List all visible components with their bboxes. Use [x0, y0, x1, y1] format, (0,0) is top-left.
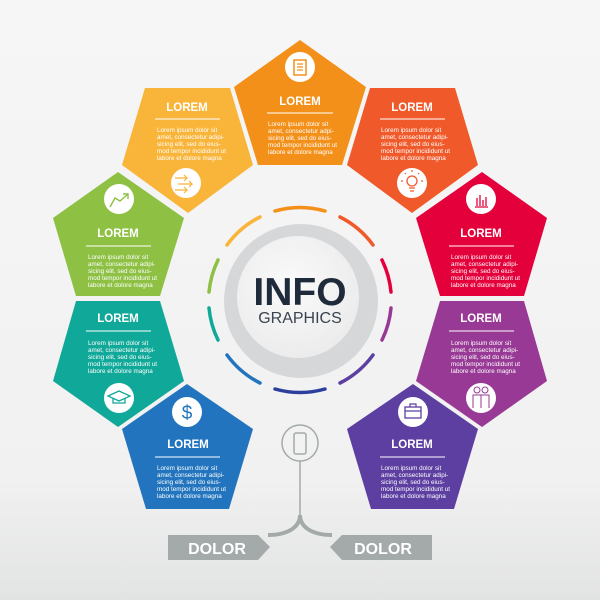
- text: labore et dolore magna: [268, 149, 333, 156]
- text: labore et dolore magna: [157, 493, 222, 500]
- label: dolor right: [330, 535, 432, 560]
- text: mod tempor incididunt ut: [268, 142, 337, 149]
- text: Lorem ipsum dolor sit: [88, 254, 148, 261]
- heading: LOREM: [391, 102, 433, 114]
- text: mod tempor incididunt ut: [451, 361, 520, 368]
- text: sicing elit, sed do eius-: [268, 135, 332, 142]
- heading: LOREM: [97, 313, 139, 325]
- text: Lorem ipsum dolor sit: [268, 121, 328, 128]
- text: labore et dolore magna: [381, 493, 446, 500]
- text: labore et dolore magna: [88, 282, 153, 289]
- text: Lorem ipsum dolor sit: [451, 340, 511, 347]
- label: dolor left: DOLOR: [188, 541, 246, 558]
- icon: trend: [104, 184, 134, 214]
- text: labore et dolore magna: [381, 155, 446, 162]
- heading: LOREM: [391, 439, 433, 451]
- panel: teal: [53, 301, 184, 427]
- dashed ring: [209, 208, 391, 392]
- panel: violet: [347, 384, 478, 509]
- text: amet, consectetur adipi-: [381, 134, 448, 141]
- icon: bulb: [397, 168, 427, 198]
- text: sicing elit, sed do eius-: [88, 268, 152, 275]
- text: mod tempor incididunt ut: [157, 148, 226, 155]
- panel: yellow: [122, 88, 253, 213]
- text: sicing elit, sed do eius-: [157, 141, 221, 148]
- text: Lorem ipsum dolor sit: [381, 127, 441, 134]
- icon: document: [285, 52, 315, 82]
- heading: LOREM: [97, 228, 139, 240]
- text: labore et dolore magna: [451, 368, 516, 375]
- text: labore et dolore magna: [88, 368, 153, 375]
- text: amet, consectetur adpi-: [268, 128, 334, 135]
- heading: LOREM: [460, 228, 502, 240]
- text: amet, consectetur adipi-: [88, 347, 155, 354]
- text: amet, consectetur adipi-: [157, 472, 224, 479]
- text: Lorem ipsum dolor sit: [88, 340, 148, 347]
- panel: green: [53, 172, 184, 296]
- panel: purple: [416, 301, 547, 427]
- text: labore et dolore magna: [451, 282, 516, 289]
- center circle: [224, 224, 378, 378]
- text: mod tempor incididunt ut: [88, 361, 157, 368]
- text: amet, consectetur adipi-: [451, 347, 518, 354]
- text: amet, consectetur adipi-: [88, 261, 155, 268]
- text: sicing elit, sed do eius-: [451, 268, 515, 275]
- text: labore et dolore magna: [157, 155, 222, 162]
- text: sicing elit, sed do eius-: [88, 354, 152, 361]
- text: Lorem ipsum dolor sit: [381, 465, 441, 472]
- heading: LOREM: [460, 313, 502, 325]
- text: amet, consectetur adipi-: [381, 472, 448, 479]
- text: mod tempor incididunt ut: [381, 486, 450, 493]
- text: sicing elit, sed do eius-: [381, 479, 445, 486]
- text: sicing elit, sed do eius-: [157, 479, 221, 486]
- text: Lorem ipsum dolor sit: [451, 254, 511, 261]
- text: amet, consectetur adipi-: [451, 261, 518, 268]
- icon: chart: [466, 184, 496, 214]
- center circle: GRAPHICS: [258, 310, 342, 327]
- icon: people: [466, 383, 496, 413]
- heading: LOREM: [166, 102, 208, 114]
- label: dolor right: DOLOR: [354, 541, 412, 558]
- label: dolor left: [168, 535, 270, 560]
- icon: phone connector: [268, 425, 332, 535]
- panel: red-orange: [347, 88, 478, 213]
- icon: arrows: [171, 168, 201, 198]
- text: amet, consectetur adipi-: [157, 134, 224, 141]
- panel: red: [416, 172, 547, 296]
- text: mod tempor incididunt ut: [157, 486, 226, 493]
- text: mod tempor incididunt ut: [381, 148, 450, 155]
- text: sicing elit, sed do eius-: [381, 141, 445, 148]
- icon: briefcase: [398, 397, 428, 427]
- text: mod tempor incididunt ut: [88, 275, 157, 282]
- icon: graduation cap: [104, 383, 134, 413]
- text: Lorem ipsum dolor sit: [157, 465, 217, 472]
- panel: top orange: [234, 40, 366, 165]
- text: mod tempor incididunt ut: [451, 275, 520, 282]
- icon: dollar: $: [182, 403, 193, 424]
- heading: LOREM: [167, 439, 209, 451]
- panel: blue: [122, 384, 253, 509]
- text: Lorem ipsum dolor sit: [157, 127, 217, 134]
- text: sicing elit, sed do eius-: [451, 354, 515, 361]
- heading: LOREM: [279, 96, 321, 108]
- title: INFO: [253, 271, 347, 314]
